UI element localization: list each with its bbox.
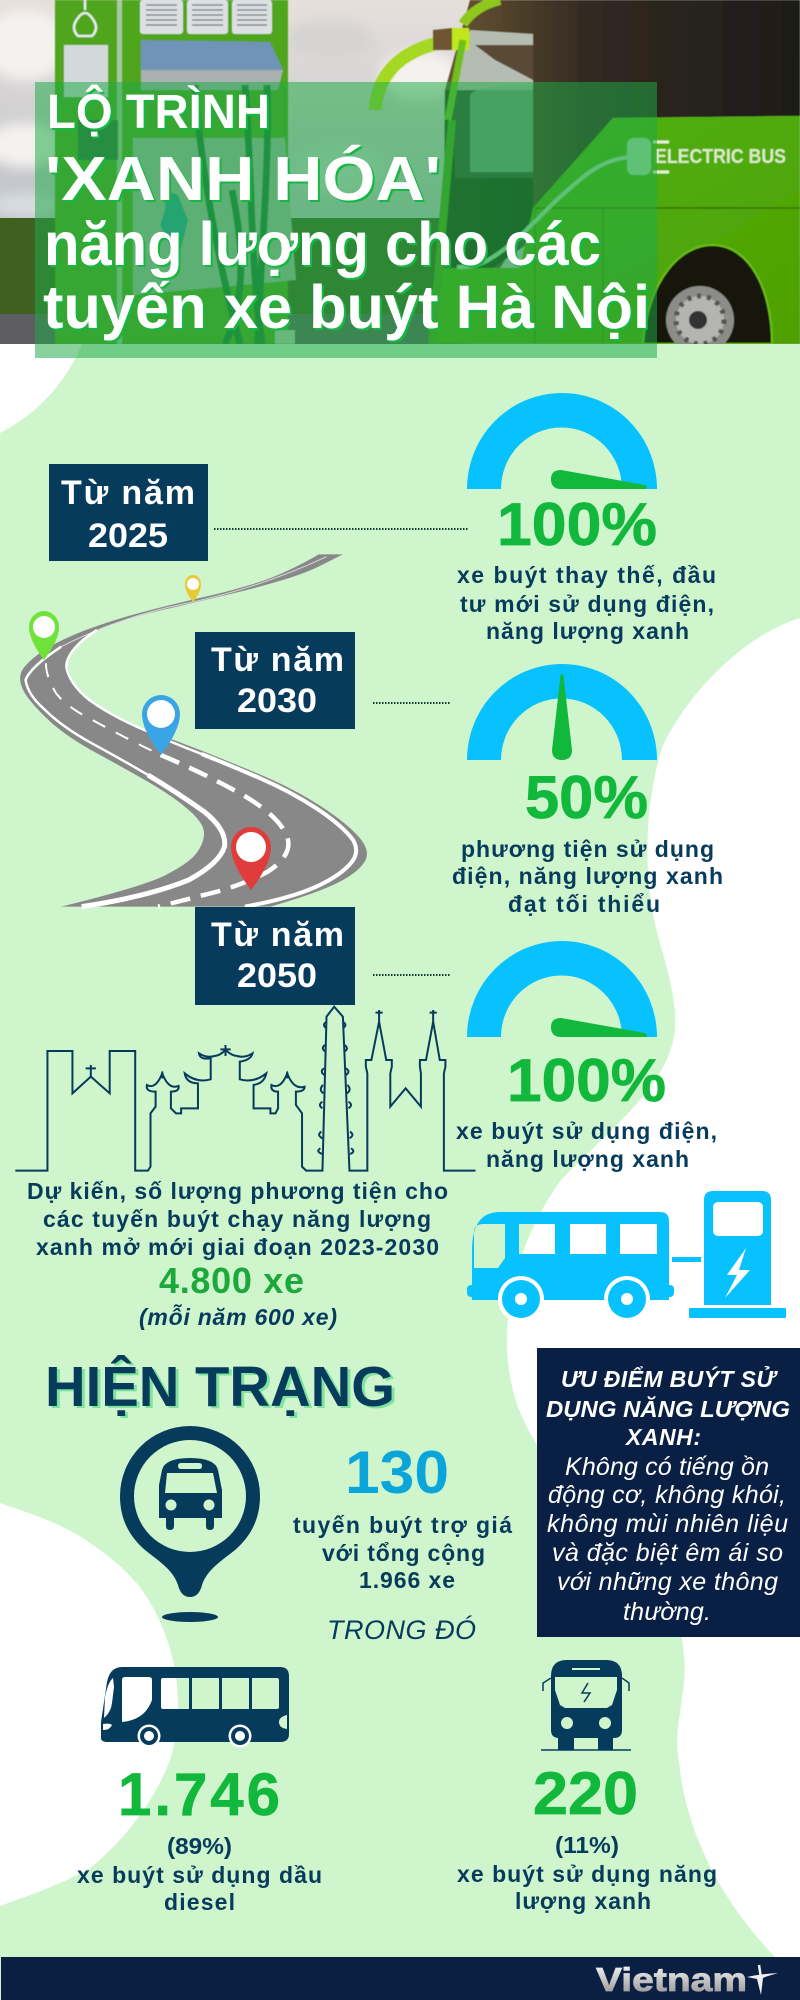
panel: advantages: với những xe thông: [557, 1568, 778, 1596]
icon: location pin with bus: [120, 1426, 260, 1622]
caption green buses: [457, 1832, 717, 1914]
caption 2030: điện, năng lượng xanh: [452, 863, 723, 889]
bus: [375, 0, 800, 354]
forecast text block: [27, 1178, 448, 1260]
panel: advantages: không mùi nhiên liệu: [547, 1510, 788, 1538]
footer bar: [1, 1957, 800, 2000]
logo: Vietnam+: Vietnam: [596, 1961, 747, 1998]
gauge 2025: [467, 393, 657, 489]
charging station: [55, 0, 296, 344]
caption diesel buses: xe buýt sử dụng dầu: [77, 1862, 322, 1888]
panel: advantages: DỤNG NĂNG LƯỢNG: [546, 1395, 790, 1422]
icon: electric bus front: [541, 1660, 631, 1750]
title: LỘ TRÌNH: [47, 84, 270, 139]
caption 2025: năng lượng xanh: [486, 618, 689, 644]
title: 'XANH HÓA': [45, 145, 441, 214]
title: [43, 84, 650, 341]
caption 130 routes: 1.966 xe: [359, 1567, 455, 1593]
bus livery text: ELECTRIC BUS: [655, 146, 786, 168]
caption 2030: [452, 836, 723, 917]
year label 2050: [195, 907, 355, 1005]
caption diesel buses: diesel: [164, 1889, 235, 1915]
stat 100 percent 2025: 100%: [497, 491, 657, 558]
title: năng lượng cho các: [44, 210, 601, 278]
stat 4.800 xe: 4.800 xe: [159, 1260, 304, 1301]
panel: advantages: động cơ, không khói,: [548, 1481, 786, 1509]
caption diesel buses: [77, 1833, 322, 1915]
caption 2030: đạt tối thiểu: [508, 891, 660, 917]
caption diesel buses: (89%): [167, 1833, 232, 1859]
caption 2025: xe buýt thay thế, đầu: [457, 562, 716, 588]
note per year: (mỗi năm 600 xe): [139, 1303, 337, 1330]
stat 50 percent: 50%: [525, 764, 648, 831]
panel: advantages: XANH:: [624, 1424, 701, 1450]
year label 2025: [49, 464, 208, 561]
icon: diesel bus: [101, 1667, 289, 1748]
panel: advantages: Không có tiếng ồn: [565, 1453, 769, 1481]
label trong đó: TRONG ĐÓ: [327, 1614, 476, 1645]
panel: advantages: thường.: [623, 1598, 711, 1626]
heading: hiện trạng: HIỆN TRẠNG: [45, 1354, 395, 1419]
map pin: blue: [142, 695, 180, 755]
map pin: yellow: [185, 575, 201, 602]
caption 2050: năng lượng xanh: [486, 1146, 689, 1172]
year label 2050: Từ năm: [211, 916, 344, 954]
caption green buses: lượng xanh: [515, 1888, 651, 1914]
caption 130 routes: tuyến buýt trợ giá: [293, 1512, 512, 1538]
gauge 2030: [467, 664, 657, 760]
year label 2025: Từ năm: [61, 474, 195, 512]
stat 1.746: 1.746: [118, 1761, 280, 1828]
caption 130 routes: với tổng cộng: [322, 1540, 485, 1566]
stat 100 percent 2050: 100%: [507, 1047, 666, 1114]
panel: advantages: và đặc biệt êm ái so: [552, 1539, 783, 1567]
caption 2030: phương tiện sử dụng: [461, 836, 714, 862]
panel: advantages: [537, 1348, 800, 1637]
gauge 2050: [467, 941, 657, 1037]
forecast text block: xanh mở mới giai đoạn 2023-2030: [36, 1234, 439, 1260]
caption 130 routes: [293, 1512, 512, 1593]
icon: electric bus at charger: [467, 1191, 786, 1322]
caption 2025: tư mới sử dụng điện,: [460, 591, 714, 617]
caption green buses: xe buýt sử dụng năng: [457, 1861, 717, 1887]
year label 2030: [195, 632, 355, 729]
title: tuyến xe buýt Hà Nội: [43, 273, 650, 341]
year label 2030: Từ năm: [211, 641, 344, 679]
year label 2050: 2050: [237, 957, 317, 995]
map pin: red: [231, 827, 271, 890]
year label 2030: 2030: [237, 682, 317, 720]
caption 2025: [457, 562, 716, 644]
grass and road: [0, 218, 470, 314]
Hanoi skyline outline: [15, 1007, 476, 1171]
title overlay panel: [35, 82, 657, 358]
map pin: green: [29, 611, 59, 660]
caption green buses: (11%): [555, 1832, 619, 1858]
forecast text block: các tuyến buýt chạy năng lượng: [43, 1206, 431, 1232]
header photo: charging station and electric bus: [0, 0, 800, 354]
road illustration: [20, 554, 367, 907]
caption 2050: [456, 1118, 717, 1172]
panel: advantages: ƯU ĐIỂM BUÝT SỬ: [561, 1365, 778, 1392]
forecast text block: Dự kiến, số lượng phương tiện cho: [27, 1178, 448, 1204]
year label 2025: 2025: [88, 517, 168, 555]
caption 2050: xe buýt sử dụng điện,: [456, 1118, 717, 1144]
stat 220: 220: [533, 1760, 638, 1827]
stat 130: 130: [345, 1439, 449, 1506]
